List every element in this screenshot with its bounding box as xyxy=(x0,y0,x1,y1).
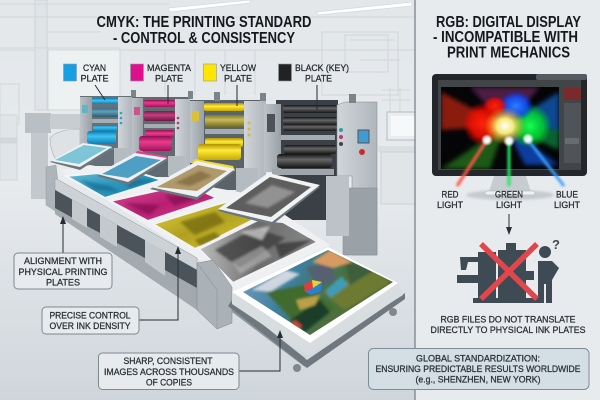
app chrome xyxy=(438,80,581,170)
callout: global standardization xyxy=(368,348,589,390)
top rail band xyxy=(55,178,197,270)
press unit: black xyxy=(264,94,377,255)
finished print stack xyxy=(228,247,405,372)
title: RGB: PRINT MECHANICS xyxy=(447,44,570,62)
tray: black proof xyxy=(218,173,320,225)
callout: global standardization: GLOBAL STANDARDIZATION: xyxy=(416,354,540,364)
yellow label xyxy=(220,63,256,84)
title: CMYK xyxy=(96,14,312,47)
printing press xyxy=(25,90,377,255)
title: RGB xyxy=(433,14,581,62)
callout: ink density: OVER INK DENSITY xyxy=(50,321,131,332)
callout: sharp images xyxy=(98,330,283,390)
yellow label: PLATE xyxy=(224,74,252,84)
mountain image xyxy=(243,250,393,335)
background computer desk xyxy=(378,112,415,204)
legend: plates xyxy=(64,63,349,84)
cube logo xyxy=(304,280,322,295)
magenta swatch xyxy=(130,64,144,81)
monitor xyxy=(432,74,587,200)
black rollers xyxy=(272,105,337,175)
cyan rollers xyxy=(87,98,118,144)
black label xyxy=(295,63,349,84)
label: green light: LIGHT xyxy=(496,200,522,211)
windows xyxy=(55,190,197,288)
corner post xyxy=(46,165,58,213)
press silhouette xyxy=(457,243,543,303)
cyan swatch xyxy=(64,64,76,81)
posts xyxy=(72,200,165,276)
label: blue light: LIGHT xyxy=(554,200,580,211)
panel: CMYK background xyxy=(0,0,415,400)
caption: RGB files: DIRECTLY TO PHYSICAL INK PLATES xyxy=(430,325,586,336)
magenta label: MAGENTA xyxy=(147,63,192,74)
panel: RGB background xyxy=(415,0,600,400)
top sheet xyxy=(232,247,398,343)
black label: PLATE xyxy=(305,74,332,84)
stack base xyxy=(228,293,405,368)
label: red light: RED xyxy=(442,190,459,200)
title: CMYK: CMYK: THE PRINTING STANDARD xyxy=(96,14,312,31)
red cross xyxy=(481,244,537,299)
magenta label: PLATE xyxy=(155,74,183,84)
sheet: magenta on bed xyxy=(108,191,214,220)
callout: sharp images: OF COPIES xyxy=(146,378,192,388)
leader arrow xyxy=(139,246,181,320)
black label: BLACK (KEY) xyxy=(295,63,349,74)
rail frame xyxy=(55,190,197,310)
feeder unit xyxy=(25,113,80,199)
feet xyxy=(293,364,301,372)
cyan label xyxy=(80,63,108,84)
callout: ink density: PRECISE CONTROL xyxy=(50,310,130,322)
label: blue light: BLUE xyxy=(556,190,578,200)
end bracket xyxy=(197,260,305,367)
yellow rollers xyxy=(198,103,245,160)
beams xyxy=(457,140,564,186)
callout: global standardization: (e.g., SHENZHEN, NEW YORK) xyxy=(416,374,540,386)
cyan label: CYAN xyxy=(83,63,106,74)
callout: alignment xyxy=(14,216,112,289)
callout: sharp images: SHARP, CONSISTENT xyxy=(124,356,213,367)
cyan label: PLATE xyxy=(80,74,108,84)
bed surface xyxy=(60,165,330,292)
caption: RGB files: RGB FILES DO NOT TRANSLATE xyxy=(440,314,576,326)
label: blue light xyxy=(554,190,580,211)
black swatch xyxy=(278,64,292,81)
title: CMYK: - CONTROL & CONSISTENCY xyxy=(113,30,295,47)
side panel xyxy=(564,88,581,163)
callout: global standardization: ENSURING PREDICTABLE RESULTS WORLDWIDE xyxy=(376,364,580,375)
factory backdrop xyxy=(0,0,415,180)
icon: crossed-out press with confused person xyxy=(457,237,560,303)
plate leader lines xyxy=(95,85,317,110)
panel divider xyxy=(414,0,416,400)
magenta label xyxy=(147,63,192,84)
press unit: yellow xyxy=(190,92,266,200)
print bed xyxy=(46,165,330,310)
leader arrow xyxy=(60,216,66,253)
callout: alignment: PHYSICAL PRINTING xyxy=(18,267,108,278)
yellow swatch xyxy=(204,64,216,81)
bezel xyxy=(432,74,587,176)
label: red light xyxy=(437,190,463,211)
tray: cyan proof xyxy=(50,143,113,170)
tray: blue proof xyxy=(97,151,168,185)
callout: alignment: ALIGNMENT WITH xyxy=(24,256,102,267)
sheet: cyan on bed xyxy=(64,174,159,199)
sheet: gray on bed xyxy=(199,220,318,283)
paper stack xyxy=(232,283,403,355)
light rays xyxy=(441,87,559,169)
control panel xyxy=(326,102,377,255)
callout: ink density xyxy=(42,246,181,334)
press unit: magenta xyxy=(132,91,193,177)
beam sources xyxy=(481,133,534,147)
yellow label: YELLOW xyxy=(220,63,256,74)
label: green light: GREEN xyxy=(495,190,523,200)
arrow: down to press icon xyxy=(506,214,512,235)
label: red light: LIGHT xyxy=(437,200,463,211)
callout: alignment: PLATES xyxy=(46,278,80,288)
callout: sharp images: IMAGES ACROSS THOUSANDS xyxy=(104,367,234,378)
label: green light xyxy=(495,190,523,211)
tray: ochre proof xyxy=(150,159,235,200)
leader arrow xyxy=(239,330,283,371)
question mark: ? xyxy=(552,237,560,252)
stand xyxy=(466,176,554,200)
person xyxy=(538,246,559,303)
sheet: yellow on bed xyxy=(153,202,253,249)
press unit: cyan xyxy=(80,90,136,172)
caption: RGB files xyxy=(430,314,586,336)
magenta rollers xyxy=(139,100,175,151)
ceiling lights xyxy=(168,0,412,15)
screen image xyxy=(441,87,559,169)
